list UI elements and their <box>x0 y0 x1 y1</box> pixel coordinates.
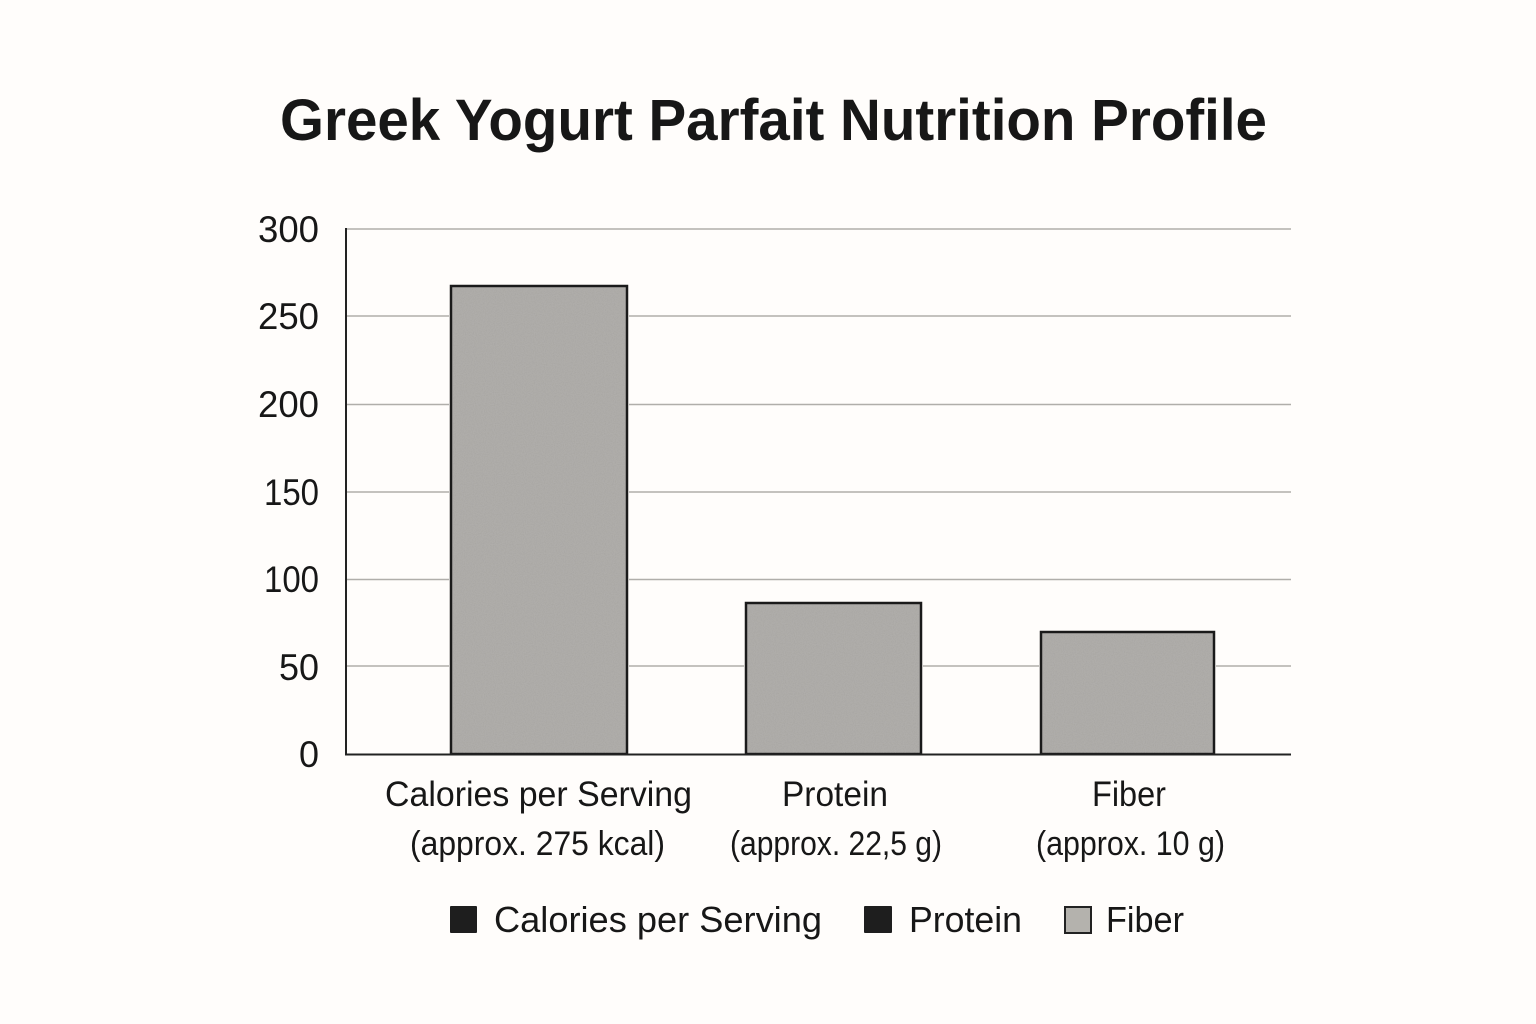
y-axis labels: 200 <box>258 384 319 425</box>
category label: protein <box>730 775 942 863</box>
y-axis labels: 50 <box>279 647 319 688</box>
legend item: fiber <box>1065 899 1184 940</box>
category label: fiber <box>1036 775 1225 863</box>
y-axis labels <box>258 209 319 775</box>
bar: fiber <box>1039 630 1216 754</box>
bar: calories per serving <box>449 284 629 754</box>
axes <box>345 228 1291 755</box>
legend <box>450 899 1184 940</box>
category label: calories <box>385 775 692 863</box>
bar: protein <box>744 601 923 754</box>
category label: protein: Protein <box>782 775 888 814</box>
title: Greek Yogurt Parfait Nutrition Profile <box>280 88 1267 153</box>
category label: fiber: Fiber <box>1092 775 1166 814</box>
y-axis labels: 300 <box>258 209 319 250</box>
legend item: fiber: Fiber <box>1106 899 1184 940</box>
legend item: calories per serving: Calories per Serving <box>494 899 822 940</box>
category label: fiber: (approx. 10 g) <box>1036 825 1225 863</box>
y-axis labels: 100 <box>264 559 319 600</box>
category label: calories: Calories per Serving <box>385 775 692 814</box>
y-axis labels: 150 <box>264 472 319 513</box>
y-axis labels: 250 <box>258 296 319 337</box>
category label: calories: (approx. 275 kcal) <box>410 825 665 863</box>
y-axis labels: 0 <box>299 734 319 775</box>
legend item: protein: Protein <box>909 899 1022 940</box>
bar chart <box>258 209 1291 863</box>
category label: protein: (approx. 22,5 g) <box>730 825 942 863</box>
